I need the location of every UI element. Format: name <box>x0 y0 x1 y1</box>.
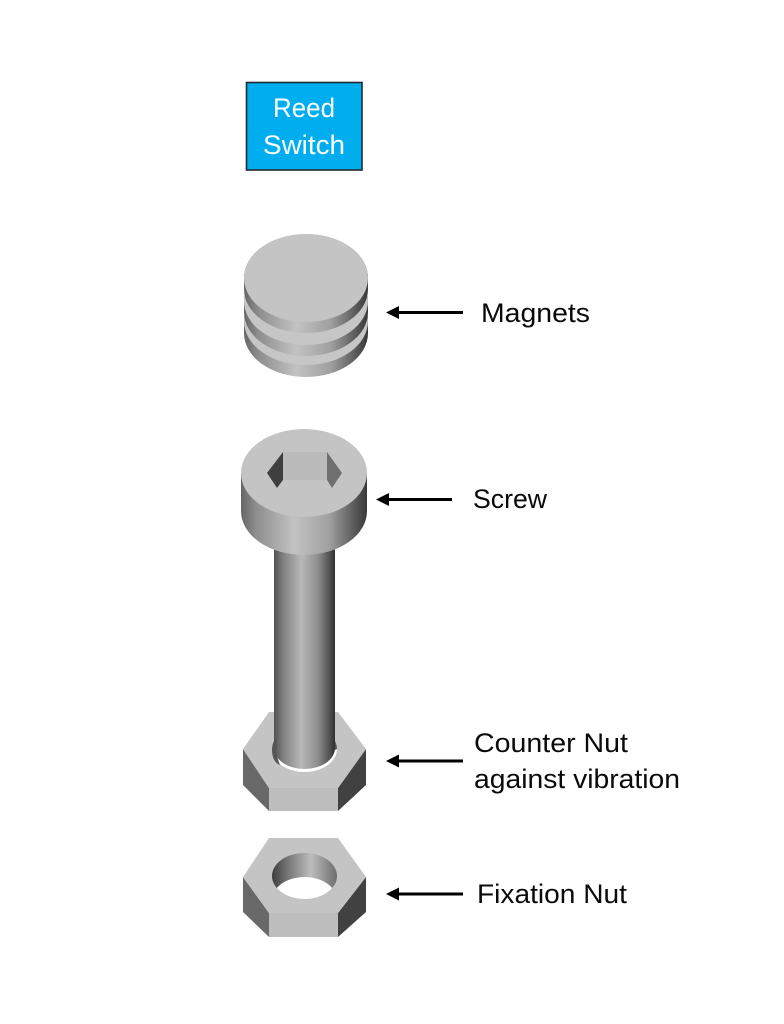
reed switch box <box>246 82 362 170</box>
label: counter nut: against vibration <box>474 764 680 794</box>
label: screw: Screw <box>473 484 547 514</box>
counter nut <box>243 712 366 811</box>
label: fixation nut: Fixation Nut <box>477 879 628 909</box>
reed switch box: Reed <box>273 93 335 123</box>
arrow: counter nut <box>386 754 463 768</box>
screw shaft <box>274 545 335 769</box>
fixation nut <box>243 838 366 937</box>
arrow: magnets <box>386 306 463 319</box>
arrow: fixation nut <box>386 888 463 900</box>
label: counter nut: Counter Nut <box>474 728 629 758</box>
label: magnets: Magnets <box>481 298 590 328</box>
screw head <box>241 429 367 555</box>
reed switch box: Switch <box>263 130 345 160</box>
hex socket <box>267 452 342 488</box>
magnets stack <box>244 234 368 377</box>
exploded assembly diagram <box>241 82 678 937</box>
arrow: screw <box>376 493 452 506</box>
label: counter nut <box>474 728 680 794</box>
